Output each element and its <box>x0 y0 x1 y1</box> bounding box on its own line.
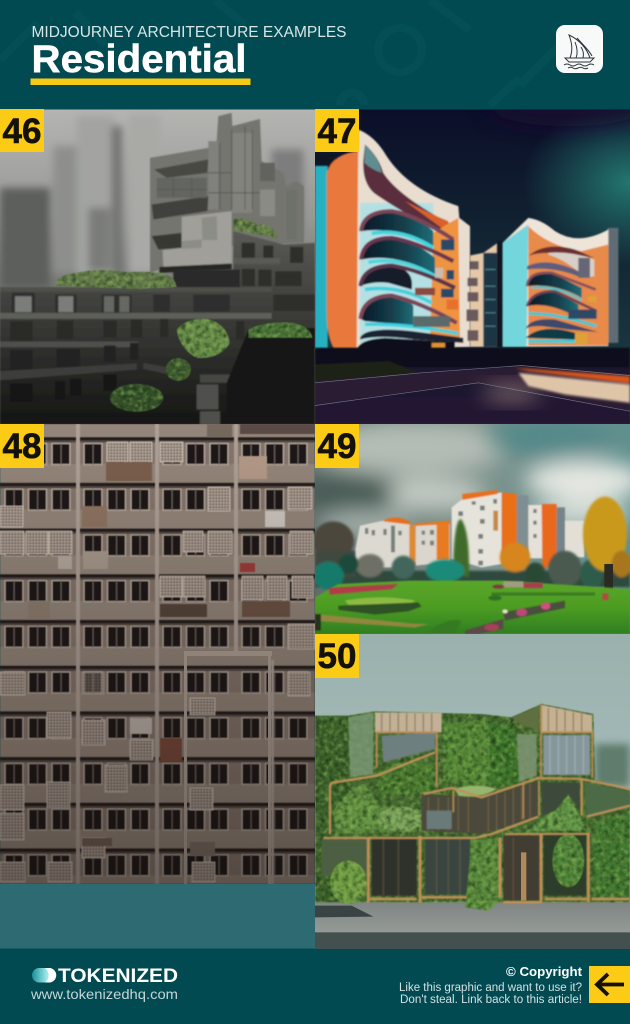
lower central bay frame <box>184 651 272 884</box>
floor two <box>10 319 244 341</box>
middle storey glass <box>422 781 538 834</box>
lawn <box>315 581 630 634</box>
clouds <box>295 417 630 537</box>
red flower fence <box>328 581 608 600</box>
balcony lens 2 <box>361 238 435 274</box>
night sky <box>315 110 630 353</box>
panel 47: neon curved apartments <box>315 86 630 424</box>
number badge 48: 48 <box>3 427 41 466</box>
kerb and foreground band <box>315 932 630 949</box>
cantilever block <box>163 211 232 267</box>
ground and road <box>315 348 630 424</box>
watermark pattern <box>0 0 560 105</box>
balcony lens 1 <box>361 211 433 246</box>
door <box>521 852 526 901</box>
floor four <box>10 374 117 395</box>
panel joints <box>173 126 260 210</box>
dark trees bottom right <box>226 328 315 395</box>
base <box>360 330 463 343</box>
rusted boxes and posters <box>28 424 315 856</box>
right curved block <box>503 218 618 347</box>
number badge 50: 50 <box>318 637 356 676</box>
panel 50: timber and green-wall building <box>315 634 630 949</box>
title: Residential <box>32 38 246 81</box>
brand logo mark <box>32 968 56 982</box>
ground floor <box>322 839 368 876</box>
wall with window grid <box>0 424 315 884</box>
middle right bay <box>542 782 580 816</box>
foliage <box>55 219 313 412</box>
title underline <box>30 78 250 85</box>
footer <box>30 964 630 1006</box>
teal filler block <box>0 884 315 948</box>
ground-floor planting <box>330 834 584 911</box>
panel 48: weathered apartment facade <box>0 424 315 884</box>
vertical darkening <box>0 483 315 884</box>
upper wing windows <box>242 243 315 311</box>
website address: www.tokenizedhq.com <box>30 986 178 1002</box>
distant tree haze <box>595 744 630 787</box>
copyright note line two: Don't steal. Link back to this article! <box>400 994 582 1006</box>
floor three <box>10 342 139 358</box>
lower building <box>0 231 315 424</box>
top sweep <box>363 144 452 236</box>
number badge 46: 46 <box>3 112 41 151</box>
eyebrow heading: MIDJOURNEY ARCHITECTURE EXAMPLES <box>32 24 346 41</box>
cool wash on balcony band <box>360 203 433 343</box>
building greenery <box>315 704 630 902</box>
right orange face <box>430 218 460 343</box>
timber frame <box>323 752 630 902</box>
copyright heading: © Copyright <box>506 964 583 979</box>
yellow tree trunk <box>604 564 613 592</box>
dark recess band <box>173 269 240 288</box>
floor one <box>12 293 230 313</box>
panel 49: orange and white apartments in a park <box>295 417 630 634</box>
number badge 49: 49 <box>318 427 356 466</box>
flower bed <box>465 601 565 634</box>
glass and timber <box>322 704 630 901</box>
road <box>315 902 630 933</box>
air conditioner grilles <box>0 442 315 882</box>
main concrete tower <box>150 113 304 273</box>
distant fog towers <box>0 114 303 288</box>
road glow <box>482 385 542 401</box>
balcony windows <box>413 239 458 349</box>
road lane lines <box>315 365 630 411</box>
header band <box>0 0 603 105</box>
upper glazing <box>348 712 373 777</box>
icon: midjourney boat logo <box>556 25 603 73</box>
foggy sky <box>0 110 315 424</box>
panel 46: brutalist concrete housing <box>0 110 315 424</box>
number badge 47: 47 <box>318 112 356 151</box>
arrow callout <box>589 966 630 1003</box>
apartment blocks <box>355 490 584 569</box>
left curved block <box>315 129 470 350</box>
pavement shadow <box>315 906 373 917</box>
copyright note line one: Like this graphic and want to use it? <box>399 982 582 994</box>
balcony lens 3 <box>360 265 412 289</box>
brand name: TOKENIZED <box>58 965 178 987</box>
balcony lens 4 <box>360 295 413 325</box>
drain pipes <box>76 424 274 884</box>
purple top-right haze <box>499 110 630 134</box>
top slatted sections <box>375 712 442 732</box>
mid-ground trees <box>313 497 630 590</box>
cloudy sky <box>315 424 630 634</box>
window dots <box>365 499 537 565</box>
hazy sky <box>315 634 630 904</box>
middle connector block <box>467 241 503 347</box>
